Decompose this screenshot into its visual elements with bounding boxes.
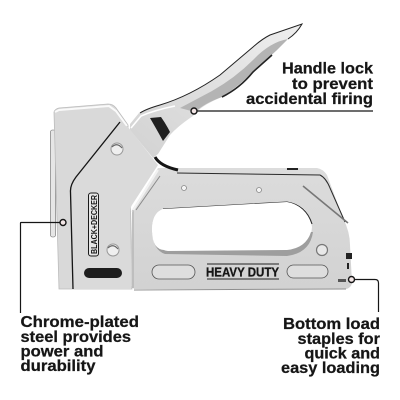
heavy duty plate: HEAVY DUTY: [206, 264, 279, 280]
text: handle lock: [246, 60, 373, 108]
text: bottom load: [281, 316, 380, 377]
front plate black edge: [70, 122, 120, 289]
handle latch: [150, 117, 170, 141]
text: chrome-plated steel: durability: [20, 358, 96, 375]
back plate top highlight: [55, 106, 127, 126]
text: handle lock: to prevent: [292, 76, 373, 93]
diagonal rod: [303, 186, 348, 223]
white window: [152, 202, 311, 250]
text: handle lock: accidental firing: [246, 91, 373, 108]
back plate: [54, 104, 132, 289]
leader line: handle lock: [193, 110, 373, 112]
text: bottom load: easy loading: [281, 360, 380, 377]
text: chrome-plated steel: power and: [20, 344, 104, 360]
handle: [130, 24, 302, 158]
nose details: [287, 168, 352, 282]
text: chrome-plated steel: Chrome-plated: [20, 314, 139, 331]
marker: handle lock: [191, 108, 197, 114]
callout: handle lock: [191, 60, 373, 114]
stapler illustration: [50, 24, 352, 290]
text: chrome-plated steel: steel provides: [20, 329, 131, 346]
brand badge: BLACK+DECKER: [90, 195, 99, 254]
leader line: bottom load: [352, 280, 378, 312]
embossed oval slots: [152, 265, 328, 279]
black slider slot: [84, 268, 122, 278]
callout: chrome-plated steel: [20, 220, 139, 375]
text: bottom load: quick and: [304, 346, 380, 362]
magazine back edge: [50, 130, 56, 237]
text: chrome-plated steel: [20, 314, 139, 375]
text: bottom load: staples for: [298, 331, 380, 348]
marker: bottom load: [348, 276, 354, 282]
main body: [131, 168, 352, 290]
black spring curve: [155, 157, 178, 170]
front plate: [71, 123, 158, 289]
rivets: [107, 143, 328, 256]
marker: chrome-plated steel: [60, 220, 66, 226]
callout: bottom load: [281, 276, 380, 377]
text: bottom load: Bottom load: [283, 316, 380, 333]
leader line: chrome-plated steel: [20, 222, 63, 313]
text: handle lock: Handle lock: [282, 60, 373, 78]
